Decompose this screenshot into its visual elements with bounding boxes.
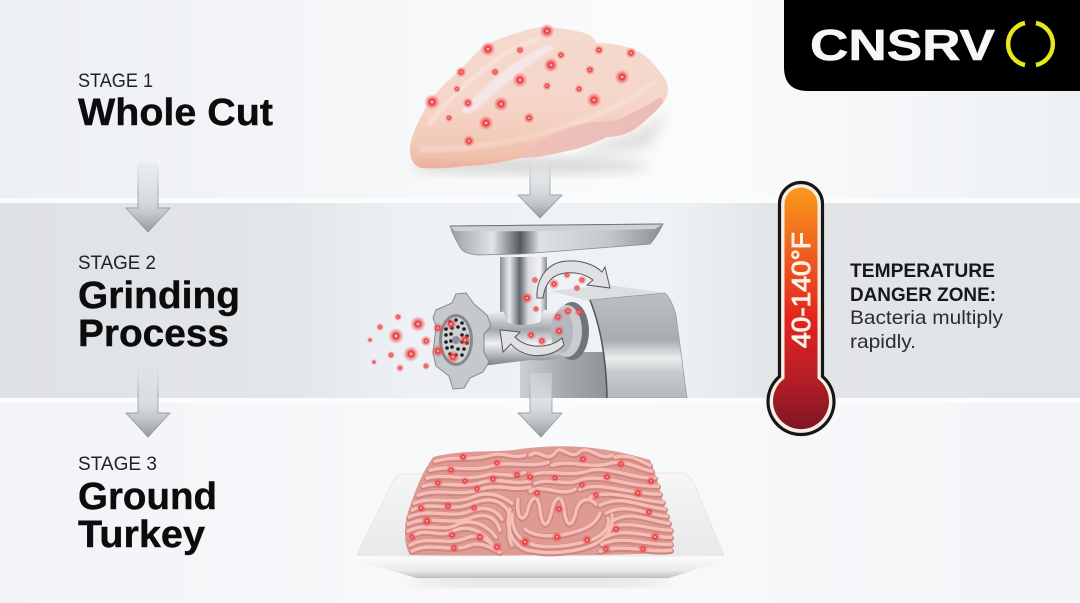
stage 1 label: Whole Cut — [78, 92, 273, 134]
arrow: grinder to ground meat — [518, 373, 562, 437]
grinder hopper tray — [450, 224, 663, 255]
meat body — [410, 27, 668, 168]
stage 1 label: STAGE 1 — [78, 71, 153, 92]
temperature danger zone text — [850, 261, 1003, 353]
arrow: turkey into grinder — [518, 160, 562, 218]
bacteria spots on meat — [408, 452, 660, 554]
temperature danger zone text: TEMPERATURE — [850, 261, 995, 282]
grinder neck base — [500, 300, 547, 325]
meat strand highlights — [408, 450, 671, 553]
arrow: stage 1 to stage 2 — [126, 163, 170, 232]
grinder barrel — [482, 310, 574, 366]
locking ring nut — [433, 293, 491, 389]
bacteria spots — [424, 24, 636, 147]
stage 3 label: Ground — [78, 476, 217, 518]
white plate — [357, 473, 723, 578]
central groove highlight — [462, 45, 554, 113]
whole turkey breast with bacteria — [410, 24, 672, 174]
stage 2 label: Process — [78, 313, 229, 355]
stage 1 label — [78, 71, 273, 134]
thermometer — [768, 182, 834, 435]
bacteria spots in grinder and spray — [367, 271, 586, 372]
underside — [520, 97, 663, 158]
arrow: stage 2 to stage 3 — [126, 367, 170, 437]
meat strands shadow layer — [408, 451, 671, 553]
logo badge — [784, 0, 1080, 91]
stage 2 label — [78, 253, 240, 355]
rotation arrow lower — [500, 330, 564, 356]
bottom rim — [412, 124, 572, 160]
logo wordmark: CNSRV — [810, 21, 996, 70]
logo brackets — [1008, 23, 1053, 65]
stage 2 label: STAGE 2 — [78, 253, 156, 274]
grinder neck — [500, 257, 547, 322]
stage 3 label — [78, 454, 217, 556]
meat grinder — [367, 224, 687, 398]
temperature danger zone text: DANGER ZONE: — [850, 285, 996, 306]
stage 3 label: Turkey — [78, 514, 205, 556]
meat mound — [405, 446, 673, 556]
temperature danger zone text: Bacteria multiply — [850, 307, 1003, 329]
rotation arrow upper — [537, 261, 610, 298]
grinder motor housing — [520, 285, 687, 398]
thermometer reading: 40-140°F — [788, 232, 816, 348]
plate of ground turkey — [357, 446, 723, 586]
temperature danger zone text: rapidly. — [850, 331, 916, 353]
divider strip under grinder — [0, 398, 1080, 403]
stage 3 label: STAGE 3 — [78, 454, 157, 475]
barrel collar — [551, 302, 589, 360]
plate holes — [444, 318, 469, 357]
stage 2 label: Grinding — [78, 275, 240, 317]
